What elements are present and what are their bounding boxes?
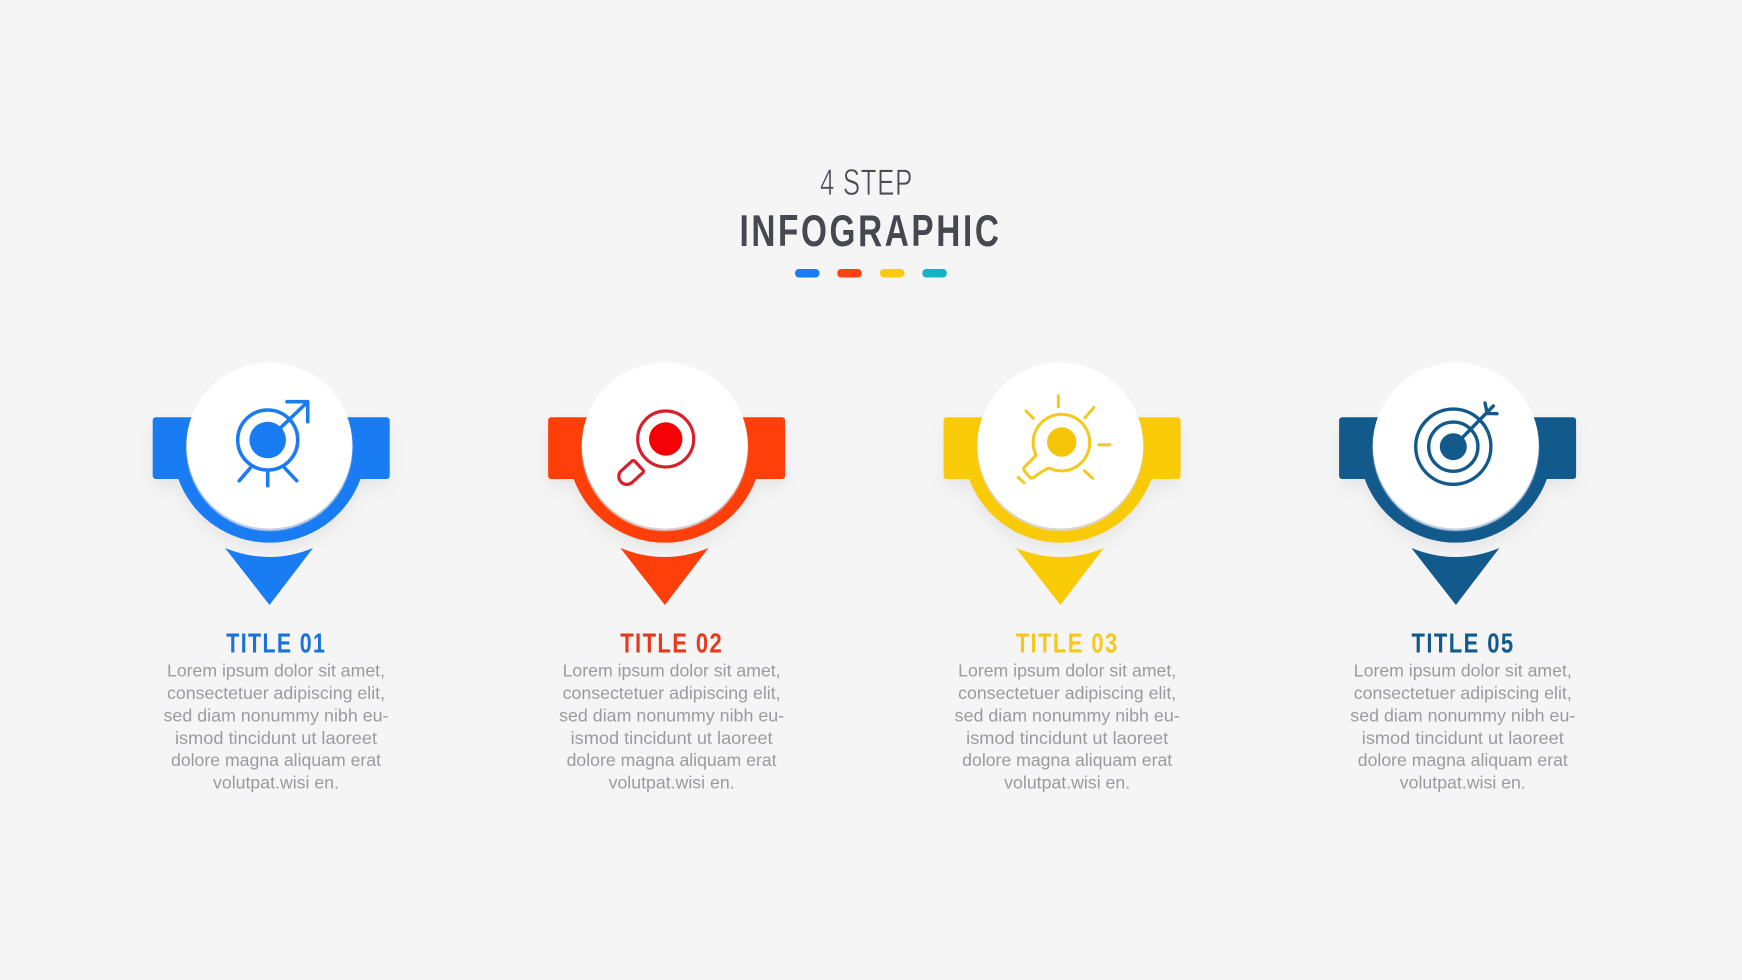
pin badge 1 [153, 362, 390, 605]
description 1: dolore magna aliquam erat [171, 750, 381, 770]
description 1: ismod tincidunt ut laoreet [175, 728, 377, 748]
description 2: Lorem ipsum dolor sit amet, [563, 661, 781, 681]
panel: step 4 [1339, 362, 1576, 793]
icon: magnifying glass [619, 411, 694, 484]
description 4: Lorem ipsum dolor sit amet, [1354, 661, 1572, 681]
icon: light bulb [1018, 396, 1110, 483]
description 3: dolore magna aliquam erat [962, 750, 1172, 770]
header [740, 162, 1002, 278]
description 1: volutpat.wisi en. [213, 773, 339, 793]
title 02: TITLE 02 [620, 628, 723, 659]
description 3 [955, 661, 1180, 793]
description 2 [559, 661, 784, 793]
panel: step 2 [548, 362, 785, 793]
description 3: Lorem ipsum dolor sit amet, [958, 661, 1176, 681]
description 4: consectetuer adipiscing elit, [1354, 683, 1572, 703]
description 4: dolore magna aliquam erat [1358, 750, 1568, 770]
description 1 [164, 661, 389, 793]
description 2: volutpat.wisi en. [609, 773, 735, 793]
colour dashes [795, 269, 947, 278]
pin badge 3 [944, 362, 1181, 605]
panel: step 3 [944, 362, 1181, 793]
description 2: sed diam nonummy nibh eu- [559, 705, 784, 725]
title 01: TITLE 01 [226, 628, 326, 659]
description 4: ismod tincidunt ut laoreet [1362, 728, 1564, 748]
description 1: Lorem ipsum dolor sit amet, [167, 661, 385, 681]
description 1: sed diam nonummy nibh eu- [164, 705, 389, 725]
description 1: consectetuer adipiscing elit, [167, 683, 385, 703]
panel: step 1 [153, 362, 390, 793]
description 3: sed diam nonummy nibh eu- [955, 705, 1180, 725]
description 2: dolore magna aliquam erat [567, 750, 777, 770]
description 3: ismod tincidunt ut laoreet [966, 728, 1168, 748]
icon: archery target with arrow [238, 402, 308, 486]
description 3: volutpat.wisi en. [1004, 773, 1130, 793]
icon: bullseye target [1416, 403, 1497, 484]
description 2: ismod tincidunt ut laoreet [571, 728, 773, 748]
description 4: volutpat.wisi en. [1400, 773, 1526, 793]
description 4: sed diam nonummy nibh eu- [1350, 705, 1575, 725]
heading: infographic: INFOGRAPHIC [740, 207, 1002, 256]
pin badge 2 [548, 362, 785, 605]
title 03: TITLE 03 [1016, 628, 1119, 659]
description 4 [1350, 661, 1575, 793]
description 3: consectetuer adipiscing elit, [958, 683, 1176, 703]
description 2: consectetuer adipiscing elit, [563, 683, 781, 703]
title 05: TITLE 05 [1412, 628, 1514, 659]
heading: 4 step: 4 STEP [820, 162, 913, 203]
pin badge 4 [1339, 362, 1576, 605]
